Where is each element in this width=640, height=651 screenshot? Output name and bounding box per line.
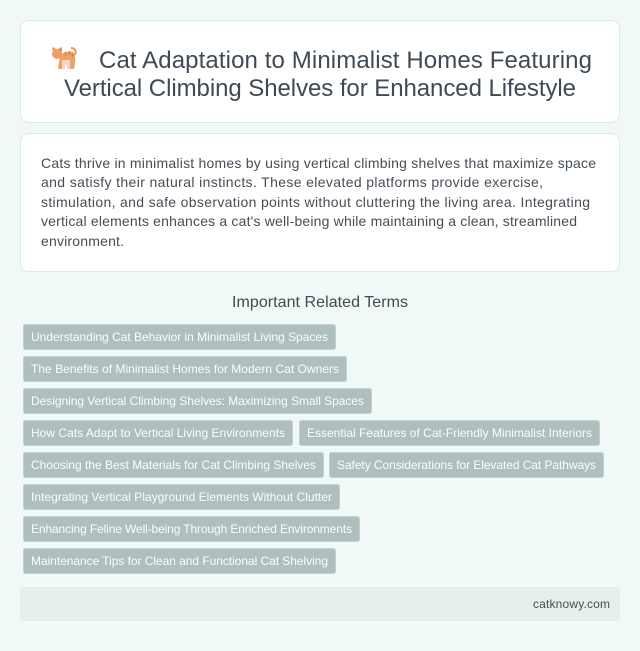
tag	[24, 516, 360, 542]
tag: How Cats Adapt to Vertical Living Environments	[31, 426, 285, 440]
panel: intro paragraph	[20, 134, 620, 272]
tag: Choosing the Best Materials for Cat Climbing Shelves	[31, 458, 316, 472]
tag: Maintenance Tips for Clean and Functional Cat Shelving	[31, 554, 328, 568]
panel: intro paragraph: stimulation, and safe observation points without cluttering the living area. Integrating	[41, 194, 590, 210]
footer band	[20, 587, 620, 621]
panel: intro paragraph: Cats thrive in minimalist homes by using vertical climbing shelves that maximize space	[41, 155, 596, 171]
related term tags	[24, 324, 604, 574]
tag	[24, 420, 292, 446]
panel: intro paragraph: vertical elements enhances a cat's well-being while maintaining a clean, streamlined	[41, 213, 577, 229]
tag: Integrating Vertical Playground Elements Without Clutter	[31, 490, 332, 504]
tag: The Benefits of Minimalist Homes for Modern Cat Owners	[31, 362, 339, 376]
footer band: catknowy.com	[533, 597, 610, 611]
tag: Designing Vertical Climbing Shelves: Maximizing Small Spaces	[31, 394, 364, 408]
panel: intro paragraph: and satisfy their natural instincts. These elevated platforms provide exercise,	[41, 174, 543, 190]
tag: Essential Features of Cat-Friendly Minimalist Interiors	[307, 426, 592, 440]
heading: related terms: Important Related Terms	[232, 294, 408, 311]
tag: Enhancing Feline Well-being Through Enriched Environments	[31, 522, 352, 536]
tag: Safety Considerations for Elevated Cat Pathways	[337, 458, 596, 472]
tag	[24, 388, 372, 414]
panel: intro paragraph: environment.	[41, 233, 124, 249]
tag	[24, 548, 336, 574]
tag	[24, 484, 340, 510]
title panel	[20, 20, 620, 122]
tag	[24, 356, 346, 382]
tag	[24, 452, 324, 478]
tag	[300, 420, 600, 446]
tag	[330, 452, 604, 478]
tag: Understanding Cat Behavior in Minimalist Living Spaces	[31, 330, 328, 344]
title text	[64, 47, 592, 102]
icon: cat	[52, 47, 76, 69]
title text: Vertical Climbing Shelves for Enhanced Lifestyle	[64, 75, 576, 102]
tag	[24, 324, 336, 350]
title text: Cat Adaptation to Minimalist Homes Featuring	[99, 47, 592, 74]
